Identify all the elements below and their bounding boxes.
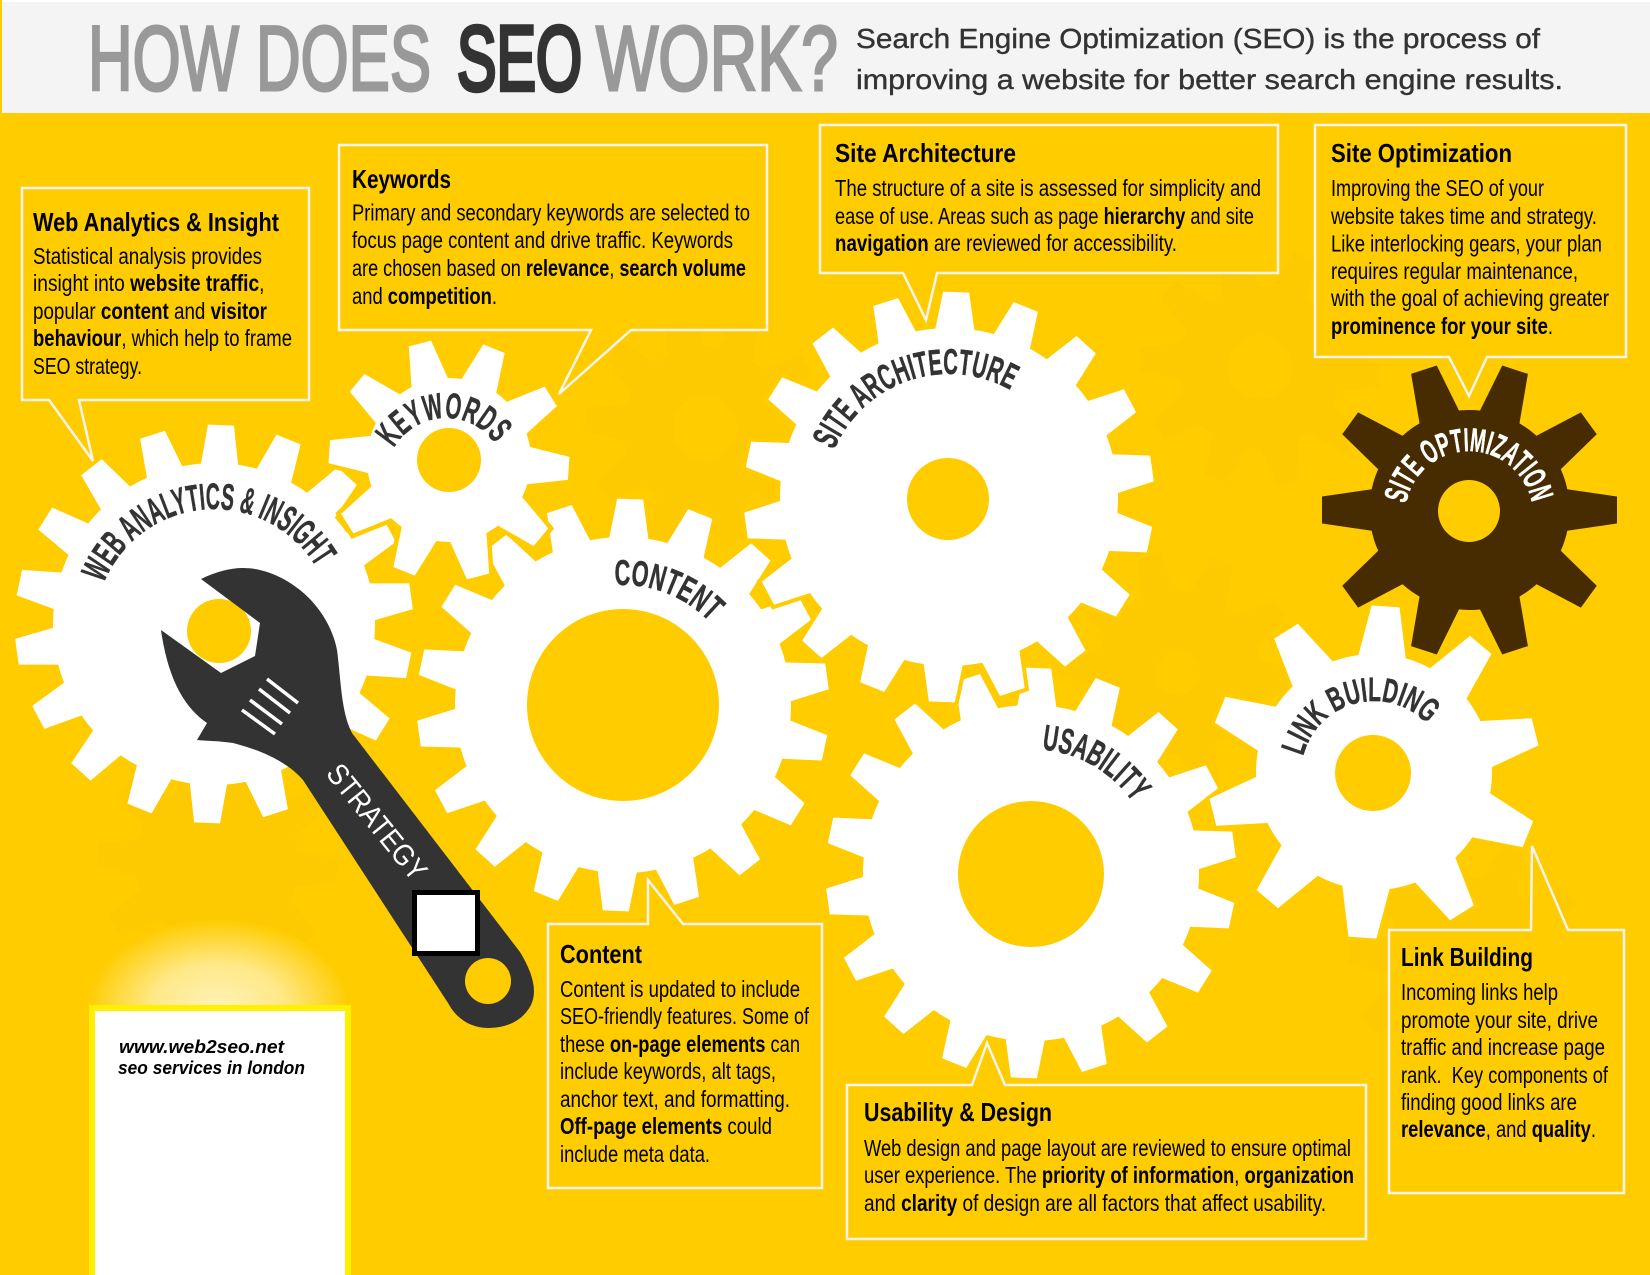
callout text: insight into website traffic, — [33, 270, 264, 296]
callout text: requires regular maintenance, — [1331, 258, 1578, 284]
callout heading: Keywords — [352, 164, 451, 194]
callout text: behaviour, which help to frame — [33, 325, 292, 351]
callout text: Off-page elements could — [560, 1113, 772, 1139]
callout text — [1401, 979, 1608, 1142]
callout text — [864, 1135, 1354, 1216]
note text: www.web2seo.net — [119, 1037, 285, 1057]
callout text — [33, 243, 292, 379]
gear: keywords — [328, 340, 570, 580]
note card — [92, 1008, 348, 1275]
gear: site optimization — [1322, 366, 1617, 654]
callout text — [352, 199, 750, 309]
gear: usability — [826, 668, 1236, 1078]
callout text: prominence for your site. — [1331, 313, 1553, 339]
callout text: traffic and increase page — [1401, 1034, 1605, 1060]
callout: keywords — [339, 145, 767, 394]
gear: link building — [1206, 605, 1538, 939]
white square on wrench — [414, 892, 478, 954]
glow behind note card — [86, 920, 350, 1096]
callout text: website takes time and strategy. — [1330, 203, 1597, 229]
note text: seo services in london — [118, 1058, 305, 1078]
callout heading: Web Analytics & Insight — [33, 207, 279, 237]
callout text: SEO-friendly features. Some of — [560, 1003, 809, 1029]
callout text: finding good links are — [1401, 1089, 1577, 1115]
callout text: ease of use. Areas such as page hierarchy and site — [835, 203, 1254, 229]
callout heading: Content — [560, 939, 642, 969]
callout text: include meta data. — [560, 1141, 710, 1167]
callout: site architecture — [820, 125, 1278, 320]
callout: content — [548, 880, 822, 1188]
title — [88, 8, 838, 110]
callout heading: Site Optimization — [1331, 138, 1512, 168]
callout text — [1330, 175, 1609, 339]
gear: keywords: KEYWORDS — [374, 392, 512, 447]
callout text: Incoming links help — [1401, 979, 1558, 1005]
intro text — [856, 23, 1563, 95]
callout text: Improving the SEO of your — [1331, 175, 1544, 201]
callout text: user experience. The priority of information, organization — [864, 1162, 1354, 1188]
callout text: Primary and secondary keywords are selected to — [352, 199, 750, 225]
gear: content — [417, 498, 829, 912]
gear: web analytics and insight: WEB ANALYTICS & INSIGHT — [80, 483, 338, 580]
faint background gears — [61, 211, 1625, 1116]
gear: link building: LINK BUILDING — [1281, 677, 1439, 756]
title: SEO — [457, 8, 582, 110]
gear: site optimization: SITE OPTIMIZATION — [1384, 428, 1554, 502]
callout text: are chosen based on relevance, search volume — [352, 255, 746, 281]
callout heading: Site Architecture — [835, 138, 1016, 168]
wrench: strategy — [161, 568, 534, 1028]
callout text: Statistical analysis provides — [33, 243, 262, 269]
callout text: anchor text, and formatting. — [560, 1086, 790, 1112]
intro text: Search Engine Optimization (SEO) is the process of — [856, 23, 1540, 54]
callout text — [560, 976, 809, 1167]
header band — [2, 0, 1650, 113]
intro text: improving a website for better search engine results. — [856, 64, 1563, 95]
callout text: popular content and visitor — [33, 298, 267, 324]
gear: site architecture — [744, 292, 1154, 704]
callout heading: Link Building — [1401, 942, 1533, 972]
callout text: these on-page elements can — [560, 1031, 800, 1057]
wrench label: STRATEGY — [320, 758, 433, 887]
callout text: include keywords, alt tags, — [560, 1058, 776, 1084]
title: HOW DOES — [88, 8, 431, 110]
callout text: relevance, and quality. — [1401, 1116, 1596, 1142]
gear: site architecture: SITE ARCHITECTURE — [813, 348, 1021, 448]
gear: content: CONTENT — [615, 560, 727, 619]
callout text: and clarity of design are all factors that affect usability. — [864, 1190, 1326, 1216]
callout: link building — [1389, 846, 1624, 1193]
gear: usability: USABILITY — [1044, 724, 1153, 798]
callout: web analytics and insight — [22, 188, 309, 461]
callout text: promote your site, drive — [1401, 1007, 1598, 1033]
gear: web analytics and insight — [15, 424, 413, 824]
callout text: focus page content and drive traffic. Keywords — [352, 227, 733, 253]
callout text: Web design and page layout are reviewed to ensure optimal — [864, 1135, 1351, 1161]
callout: site optimization — [1315, 125, 1626, 396]
wrench grip lines — [242, 679, 298, 734]
callout text: Content is updated to include — [560, 976, 800, 1002]
callout text: The structure of a site is assessed for simplicity and — [835, 175, 1261, 201]
callout text: SEO strategy. — [33, 353, 142, 379]
callout text — [835, 175, 1261, 256]
callout: usability and design — [847, 1043, 1366, 1239]
callout text: navigation are reviewed for accessibility. — [835, 230, 1177, 256]
callout text: and competition. — [352, 283, 497, 309]
wrench hole — [465, 958, 511, 1004]
callout heading: Usability & Design — [864, 1097, 1052, 1127]
note text — [118, 1037, 305, 1078]
title: WORK? — [596, 8, 838, 110]
